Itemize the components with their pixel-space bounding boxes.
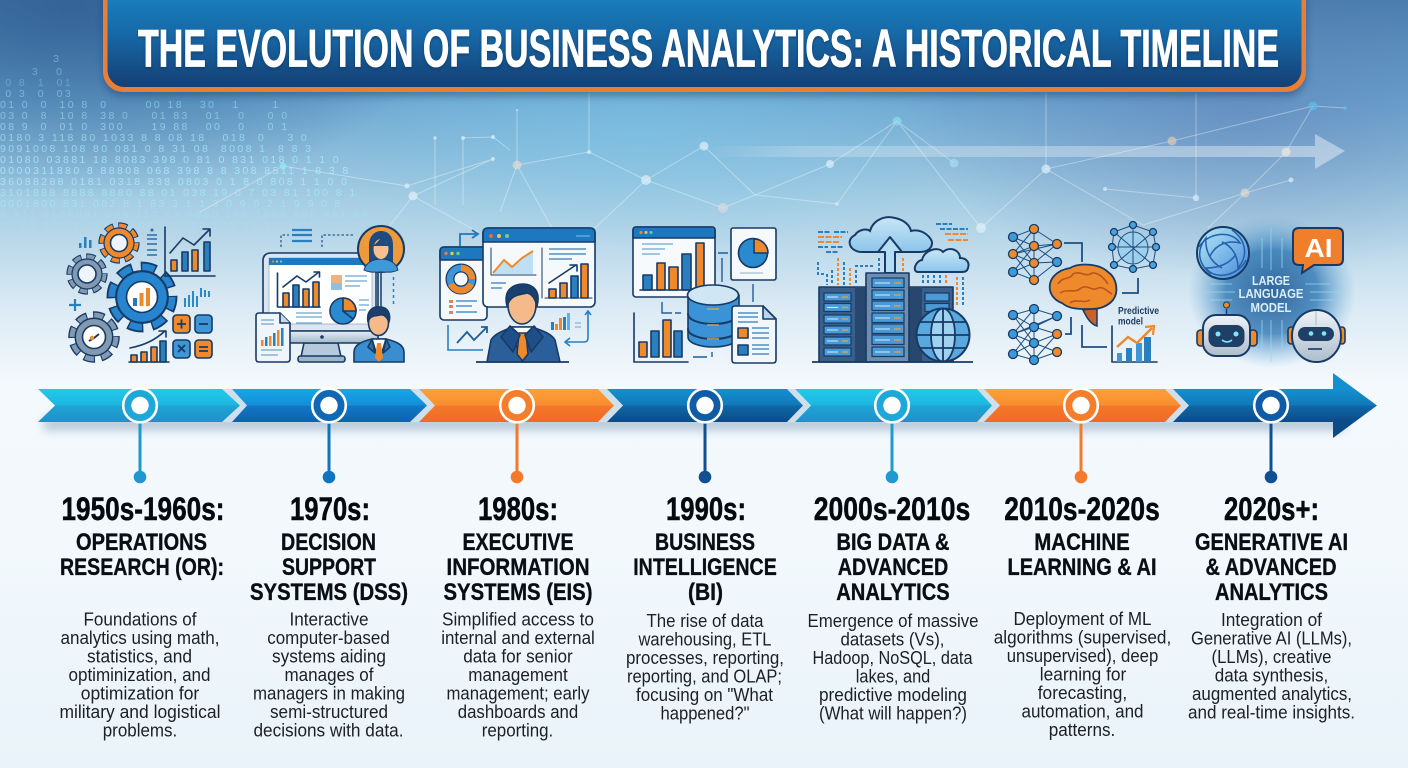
year heading: 2010s-2020s xyxy=(1004,491,1160,527)
node 1970s xyxy=(312,389,346,483)
AI label: AI xyxy=(1304,233,1332,263)
large language model label: MODEL xyxy=(1250,301,1292,315)
upload arrow xyxy=(878,237,902,273)
mini bars xyxy=(184,288,210,307)
description xyxy=(60,608,220,740)
column: 1990s xyxy=(626,491,784,724)
binary data rain decoration: 08 9 0 01 0 300 19 88 00 0 0 1 xyxy=(0,121,289,133)
description: reporting. xyxy=(482,720,553,740)
segment 4 xyxy=(607,389,803,422)
bottom gray gear xyxy=(73,316,115,358)
description: statistics, and xyxy=(87,646,192,666)
icon: decision support monitor xyxy=(256,226,404,362)
binary data rain decoration xyxy=(0,53,370,243)
network nodes xyxy=(280,102,1347,233)
dark glow panel xyxy=(1188,216,1356,368)
description: (LLMs), creative xyxy=(1212,646,1332,667)
description: analytics using math, xyxy=(60,627,220,648)
description: manages of xyxy=(284,664,374,685)
network constellation decoration xyxy=(200,93,1345,232)
window bar chart xyxy=(633,227,715,297)
binary data rain decoration: 01 0 0 10 8 0 00 18 30 1 1 xyxy=(0,99,281,111)
node 1950s xyxy=(123,389,157,483)
era heading xyxy=(836,529,950,606)
era heading: EXECUTIVE xyxy=(462,529,574,556)
binary data rain decoration: 3 0 8 1 03 00 8 1 03 198 0 0 1 08 1 03 9 1 0 0 xyxy=(0,231,324,243)
era heading: DECISION xyxy=(281,529,376,556)
description xyxy=(808,610,978,724)
era heading: MACHINE xyxy=(1034,529,1130,556)
neural net bottom left xyxy=(1008,304,1062,364)
era heading: OPERATIONS xyxy=(76,529,207,556)
column: 2000s-2010s xyxy=(808,491,978,724)
title banner xyxy=(103,0,1306,96)
connectors xyxy=(281,230,394,307)
pipe xyxy=(376,272,381,310)
description: data for senior xyxy=(463,646,573,666)
neural net top right xyxy=(1108,222,1160,272)
description: data synthesis, xyxy=(1215,664,1328,686)
big blue gear xyxy=(113,268,171,326)
node 1980s xyxy=(500,389,534,483)
description: processes, reporting, xyxy=(626,647,784,668)
bottom left trend xyxy=(448,325,487,350)
description: military and logistical xyxy=(60,701,220,722)
binary data rain decoration: 01080 03881 18 8083 398 0 81 0 831 018 0 1 1 0 xyxy=(0,154,341,166)
connector lines xyxy=(662,253,753,357)
top right chart xyxy=(165,227,215,276)
era heading xyxy=(633,529,777,606)
icon: generative AI and large language model xyxy=(1188,216,1356,368)
description: datasets (Vs), xyxy=(840,628,944,650)
description: The rise of data xyxy=(646,610,764,631)
description: learning for xyxy=(1040,664,1126,684)
binary data rain decoration: 06 03 186 1 086 8 108 180 86 108 00 10 38 06 00 1 xyxy=(0,220,360,232)
binary data rain decoration: 36088288 0181 0318 838 0803 0 1 8 0 808 1 1 0 0 xyxy=(0,176,349,188)
node 1990s xyxy=(688,389,722,483)
timeline band xyxy=(38,373,1377,438)
small bars xyxy=(79,237,92,248)
binary data rain decoration: 03 0 8 10 8 38 0 01 83 01 0 0 0 xyxy=(0,110,289,122)
bottom rising chart xyxy=(129,331,169,362)
description: Emergence of massive xyxy=(808,610,978,631)
bottom bar chart xyxy=(634,313,688,362)
segment 5 xyxy=(795,389,992,422)
globe xyxy=(916,308,970,362)
description: Foundations of xyxy=(84,608,197,630)
segment 3 xyxy=(419,389,614,422)
binary data rain decoration: 3 0 xyxy=(0,66,64,78)
description: decisions with data. xyxy=(254,720,404,740)
binary data rain decoration: 0 8 1 01 xyxy=(0,77,73,89)
database xyxy=(688,285,739,347)
description: Interactive xyxy=(290,608,368,630)
era heading: LEARNING & AI xyxy=(1008,554,1156,581)
description: managers in making xyxy=(253,682,405,704)
description: problems. xyxy=(103,720,177,740)
node 2020s xyxy=(1254,389,1288,483)
description: internal and external xyxy=(441,627,595,648)
era heading xyxy=(60,529,224,581)
description xyxy=(441,608,595,740)
description: algorithms (supervised, xyxy=(994,626,1171,648)
description: Integration of xyxy=(1221,609,1323,630)
description: semi-structured xyxy=(270,701,388,722)
description: forecasting, xyxy=(1038,682,1127,703)
era heading: ANALYTICS xyxy=(836,579,950,606)
node 2000s xyxy=(875,389,909,483)
year heading: 1990s: xyxy=(666,491,746,527)
description xyxy=(1188,609,1355,722)
binary data rain decoration: 8 911 0108081 008 117 63 0080 398 1008 690 881 09 xyxy=(0,209,370,221)
clouds xyxy=(850,217,969,272)
description: Generative AI (LLMs), xyxy=(1191,628,1352,648)
node 2010s xyxy=(1064,389,1098,483)
year heading: 2000s-2010s xyxy=(814,491,970,527)
column: 2020s+ xyxy=(1188,491,1355,722)
friendly robot xyxy=(1197,302,1257,356)
description: automation, and xyxy=(1022,700,1144,722)
predictive chart xyxy=(1112,326,1157,362)
binary data rain decoration: 9091008 108 80 081 0 8 31 08 8008 1 8 8 3 xyxy=(0,143,313,155)
era heading: RESEARCH (OR): xyxy=(60,554,224,581)
right window xyxy=(483,228,595,307)
left window xyxy=(440,247,487,320)
description: unsupervised), deep xyxy=(1007,645,1158,666)
description: management xyxy=(468,664,568,685)
server racks xyxy=(812,273,973,362)
orange gear xyxy=(102,226,136,260)
description: Simplified access to xyxy=(442,608,594,630)
binary data rain decoration: 3 xyxy=(0,53,61,65)
description: optiminization, and xyxy=(68,664,210,685)
small bars and loop arrow xyxy=(551,311,591,346)
era heading xyxy=(1195,529,1348,606)
faint progress arrow xyxy=(704,134,1345,169)
description: lakes, and xyxy=(856,666,930,686)
description: systems aiding xyxy=(272,646,386,666)
icon: business intelligence charts and database xyxy=(633,227,776,363)
description: computer-based xyxy=(267,627,390,648)
segment 6 xyxy=(984,389,1181,422)
man avatar xyxy=(354,307,404,362)
column: 1980s xyxy=(441,491,595,740)
monitor xyxy=(263,253,378,362)
era heading xyxy=(444,529,592,606)
silver robot xyxy=(1288,310,1345,362)
description: focusing on "What xyxy=(636,684,773,705)
plus sign xyxy=(69,299,81,311)
woman avatar xyxy=(358,226,404,272)
description: happened?" xyxy=(660,702,750,724)
gray gear xyxy=(70,257,104,291)
icon: operations research gears and charts xyxy=(69,226,215,362)
binary data rain decoration: 0 3 0 03 xyxy=(0,88,73,100)
document xyxy=(256,313,290,362)
timeline nodes and stems xyxy=(123,389,1288,483)
column: 1950s-1960s xyxy=(60,491,224,740)
AI speech bubble xyxy=(1293,228,1343,273)
description: (What will happen?) xyxy=(819,702,967,724)
era heading: (BI) xyxy=(688,579,723,606)
calculator tiles xyxy=(173,315,212,358)
description xyxy=(626,610,784,724)
description: warehousing, ETL xyxy=(638,628,772,650)
brain xyxy=(1050,265,1116,326)
predictive model label: Predictive xyxy=(1118,306,1159,317)
year heading: 1980s: xyxy=(478,491,558,527)
divide sign xyxy=(147,229,157,255)
era heading xyxy=(1008,529,1156,581)
icon: machine learning brain and neural nets xyxy=(1008,222,1160,364)
pie card xyxy=(731,228,776,280)
era heading: & ADVANCED xyxy=(1206,554,1336,581)
predictive model label: model xyxy=(1118,316,1143,328)
neural net top left xyxy=(1008,224,1062,284)
year heading: 1950s-1960s: xyxy=(62,491,224,527)
data dashes xyxy=(818,224,968,307)
description: Deployment of ML xyxy=(1014,608,1152,629)
description: augmented analytics, xyxy=(1192,683,1352,704)
knot emblem xyxy=(1197,227,1249,279)
era heading: ADVANCED xyxy=(838,554,948,581)
year heading: 1970s: xyxy=(290,491,370,527)
era heading: SUPPORT xyxy=(282,554,376,581)
segment 2 xyxy=(232,389,427,422)
column: 1970s xyxy=(250,491,408,740)
description: optimization for xyxy=(81,682,199,704)
era heading: INFORMATION xyxy=(446,554,590,581)
binary data rain decoration: 0000311880 8 88808 068 398 8 8 308 8511 1 8 3 8 xyxy=(0,165,351,177)
icon: big data servers and cloud xyxy=(812,217,973,362)
executive man xyxy=(476,284,569,362)
segment 7 arrowhead xyxy=(1173,373,1377,438)
circuit traces xyxy=(1205,228,1342,362)
column: 2010s-2020s xyxy=(994,491,1171,740)
large language model label xyxy=(1238,274,1304,315)
large language model label: LANGUAGE xyxy=(1238,287,1304,301)
binary data rain decoration: 0180 3 118 80 1033 8 8 08 18 018 0 3 0 xyxy=(0,132,309,144)
predictive model label xyxy=(1118,306,1159,328)
era heading: SYSTEMS (EIS) xyxy=(444,579,592,606)
connectors xyxy=(1064,243,1138,347)
segment 1 xyxy=(38,389,240,422)
era heading: BIG DATA & xyxy=(836,529,950,556)
band shadow xyxy=(44,418,1344,430)
era heading: SYSTEMS (DSS) xyxy=(250,579,408,606)
era heading: BUSINESS xyxy=(655,529,755,556)
pale chevron separators xyxy=(222,389,1189,422)
icon: executive dashboards xyxy=(440,228,595,362)
year heading: 2020s+: xyxy=(1224,491,1319,527)
era heading: ANALYTICS xyxy=(1215,579,1328,606)
large language model label: LARGE xyxy=(1252,274,1290,288)
description: management; early xyxy=(446,682,590,704)
description xyxy=(253,608,405,740)
description xyxy=(994,608,1171,740)
era heading: GENERATIVE AI xyxy=(1195,529,1348,556)
era heading: INTELLIGENCE xyxy=(633,554,777,581)
arrow top left xyxy=(460,230,478,246)
report document xyxy=(732,306,776,363)
description: Hadoop, NoSQL, data xyxy=(812,647,973,668)
description: reporting, and OLAP; xyxy=(627,666,782,686)
era heading xyxy=(250,529,408,606)
description: dashboards and xyxy=(458,701,578,722)
description: predictive modeling xyxy=(819,684,967,705)
binary data rain decoration: 0001800 831 082 8 1 83 3 1 1 3 0 9 0 2 1 9 9 0 8 xyxy=(0,198,343,210)
description: patterns. xyxy=(1049,719,1115,740)
binary data rain decoration: 3101888 8888 8880 88 01 038 19 0 7 03 81 100 8 1 xyxy=(0,187,358,199)
description: and real-time insights. xyxy=(1188,702,1355,722)
